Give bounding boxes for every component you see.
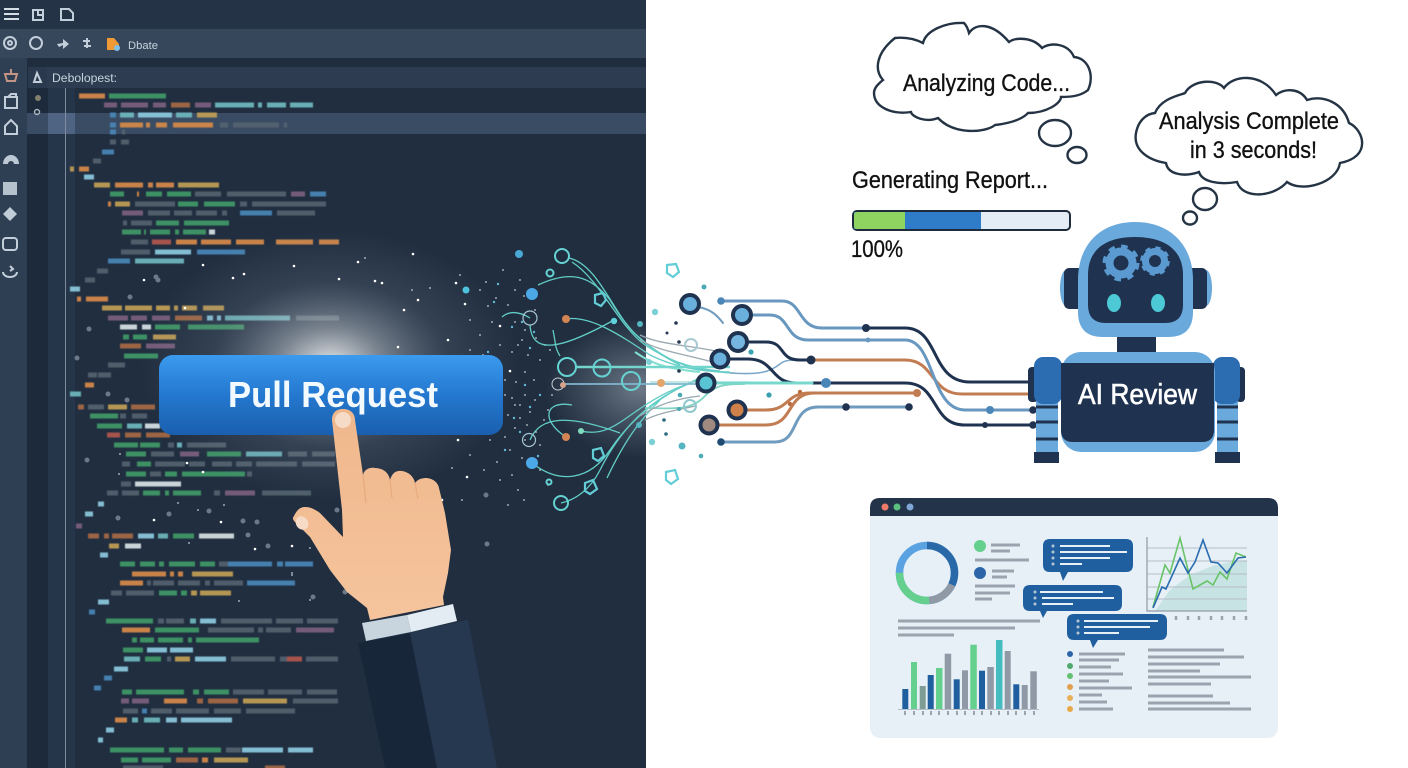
- wire: dark upper route: [866, 328, 1030, 382]
- menu bar icons: [4, 9, 73, 20]
- text lines right: [1148, 650, 1251, 709]
- hand pointing: [293, 409, 497, 768]
- wire: light blue top: [721, 301, 866, 328]
- line chart: [1147, 537, 1247, 620]
- robot body: AI Review: [1061, 352, 1215, 452]
- robot: [1028, 222, 1245, 463]
- thought bubble: analyzing code: Analyzing Code...: [903, 70, 1070, 97]
- hand: [293, 409, 451, 620]
- code lines: [70, 96, 339, 768]
- bar chart: [898, 640, 1039, 715]
- robot head: [1060, 222, 1212, 354]
- wire: blue route: [754, 315, 1030, 410]
- status list: [1067, 651, 1132, 712]
- ring nodes and beams: [522, 249, 730, 510]
- teal network streams: [502, 258, 805, 503]
- comment bubble 2: [1023, 585, 1122, 618]
- robot gears: [1104, 246, 1168, 280]
- wire: orange G: [717, 393, 815, 425]
- button: Pull Request: Pull Request: [228, 374, 438, 415]
- wire: blue lower: [721, 407, 909, 442]
- text lines left: [898, 621, 1040, 635]
- sidebar icons: [3, 69, 19, 277]
- thought bubble: analysis complete: in 3 seconds!: [1190, 137, 1317, 164]
- pentagon markers: [585, 264, 679, 494]
- panel: report dashboard: [870, 498, 1278, 738]
- comment bubble 1: [1043, 539, 1133, 581]
- sleeve: [358, 620, 497, 768]
- thought bubble: analyzing code: [874, 23, 1091, 163]
- robot body: AI Review: AI Review: [1078, 379, 1198, 411]
- gutter markers: [34, 95, 41, 114]
- toolbar: Dbate: [128, 40, 158, 52]
- thought bubble: analysis complete: Analysis Complete: [1159, 108, 1339, 135]
- wire nodes: [681, 295, 1037, 446]
- progress: generating report: [851, 167, 1070, 263]
- wire: orange upper route: [811, 360, 1030, 394]
- toolbar: [4, 37, 158, 52]
- progress: generating report: Generating Report...: [852, 167, 1048, 194]
- window dots: [882, 504, 914, 510]
- comment bubble 3: [1067, 614, 1167, 648]
- wire: orange F: [745, 393, 917, 410]
- wire: dark lower route: [728, 359, 1030, 425]
- donut chart: [900, 546, 954, 600]
- progress: generating report: 100%: [851, 236, 903, 263]
- tab title: Debolopest:: [52, 73, 117, 85]
- finger creases: [363, 475, 418, 503]
- wires to robot: [698, 301, 1030, 442]
- wire: dark short: [746, 342, 811, 360]
- button: Pull Request: [159, 355, 503, 435]
- legend items: [974, 540, 1029, 599]
- glow at panel edge: [558, 327, 646, 448]
- robot left arm: [1028, 357, 1062, 463]
- robot eyes: [1107, 294, 1165, 312]
- fingernails: [293, 412, 351, 532]
- panel: code editor: [0, 0, 646, 768]
- wire: teal stream: [712, 382, 812, 384]
- wire: tail: [698, 307, 723, 323]
- thought bubble: analysis complete: [1136, 78, 1362, 225]
- particles: [77, 254, 552, 601]
- glow behind button: [140, 230, 520, 500]
- teal and dark dots: [515, 250, 802, 469]
- robot right arm: [1213, 357, 1245, 463]
- cuff: [362, 604, 457, 641]
